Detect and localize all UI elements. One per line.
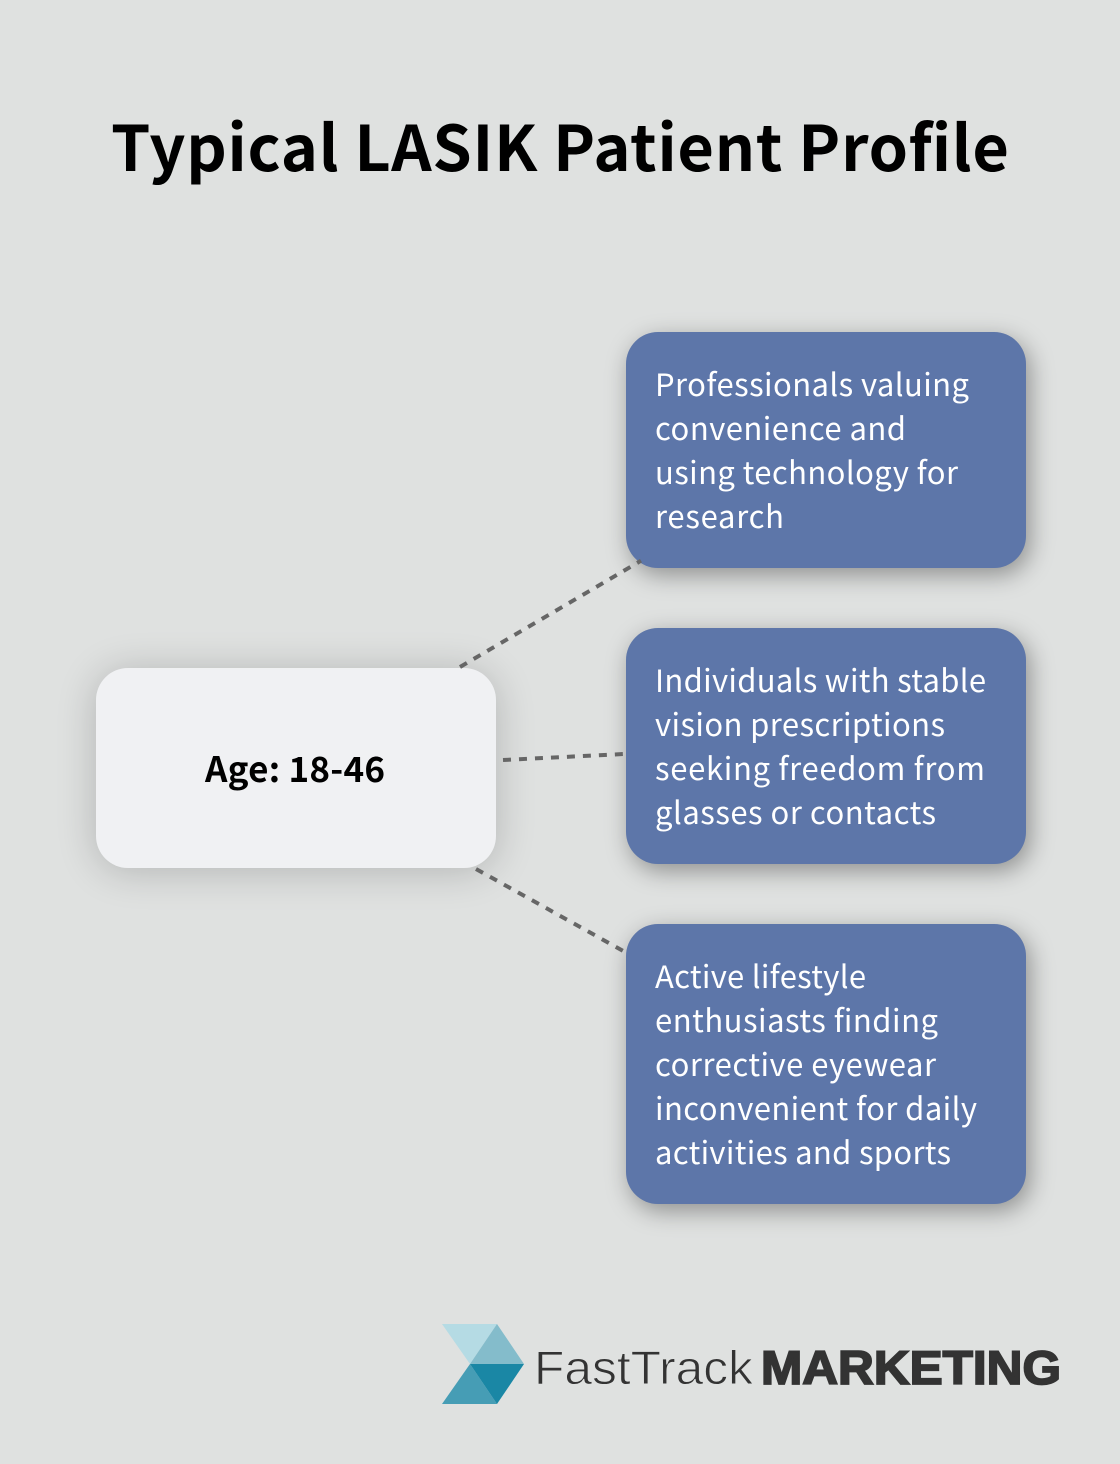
- panel: active lifestyle: [626, 924, 1026, 1204]
- panel: active lifestyle: Active lifestyle: [655, 952, 866, 997]
- panel: professionals: Professionals valuing: [655, 360, 970, 405]
- wordmark: [534, 1341, 1061, 1394]
- panel: active lifestyle: corrective eyewear: [655, 1040, 937, 1085]
- panel: stable vision: Individuals with stable: [655, 656, 986, 701]
- panel: active lifestyle: inconvenient for daily: [655, 1084, 977, 1129]
- title: Typical LASIK Patient Profile: [111, 99, 1009, 190]
- panel: active lifestyle: enthusiasts finding: [655, 996, 939, 1041]
- panel: stable vision: vision prescriptions: [655, 700, 945, 745]
- wordmark: FastTrack: [534, 1341, 754, 1394]
- icon: logo triangles: [442, 1324, 524, 1404]
- panel: age: [96, 668, 496, 868]
- panel: active lifestyle: activities and sports: [655, 1128, 951, 1173]
- panel: stable vision: glasses or contacts: [655, 788, 936, 833]
- panel: professionals: research: [655, 492, 784, 537]
- panel: professionals: convenience and: [655, 404, 906, 449]
- panel: professionals: [626, 332, 1026, 568]
- panel: professionals: using technology for: [655, 448, 959, 493]
- panel: age: Age: 18-46: [204, 742, 385, 793]
- wordmark: MARKETING: [761, 1341, 1061, 1394]
- panel: stable vision: seeking freedom from: [655, 744, 985, 789]
- panel: stable vision: [626, 628, 1026, 864]
